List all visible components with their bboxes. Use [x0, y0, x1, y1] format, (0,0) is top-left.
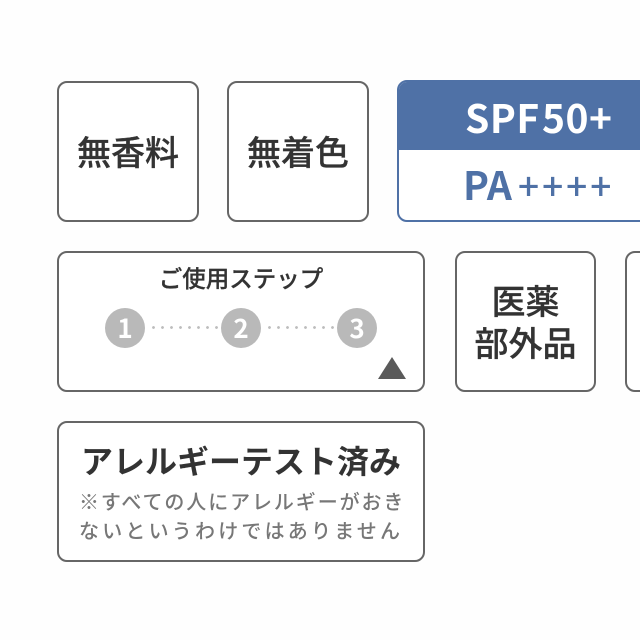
panel: usage steps: [57, 251, 425, 392]
icon: triangle marker: [378, 357, 406, 379]
step 3: [337, 308, 377, 348]
badge: SPF and PA rating: [397, 80, 640, 222]
label: quasi-drug: [474, 284, 576, 364]
badge: fragrance free: [57, 81, 199, 222]
badge: colorant free: [227, 81, 369, 222]
SPF label: SPF: [465, 89, 540, 145]
step 2: 2: [233, 309, 249, 346]
step 3: 3: [349, 309, 365, 346]
badge: partial next box: [625, 251, 640, 392]
note: allergy disclaimer: ※すべての人にアレルギーがおき: [79, 492, 405, 514]
badge: quasi-drug: [455, 251, 596, 392]
heading: usage steps: ご使用ステップ: [159, 266, 323, 292]
note: allergy disclaimer: [79, 492, 405, 542]
label: fragrance free: 無香料: [77, 135, 179, 173]
step 2: [221, 308, 261, 348]
heading: allergy tested: アレルギーテスト済み: [81, 444, 401, 480]
step 1: [105, 308, 145, 348]
SPF value: 50+: [542, 89, 613, 145]
note: allergy disclaimer: ないというわけではありません: [79, 520, 403, 542]
panel: allergy tested: [57, 421, 425, 562]
label: quasi-drug: 医薬: [492, 284, 560, 322]
PA plus signs: ++++: [518, 157, 614, 211]
SPF banner: [399, 82, 640, 150]
label: quasi-drug: 部外品: [474, 326, 576, 364]
label: colorant free: 無着色: [247, 135, 349, 173]
step 1: 1: [117, 309, 133, 346]
PA label: PA: [463, 156, 512, 212]
